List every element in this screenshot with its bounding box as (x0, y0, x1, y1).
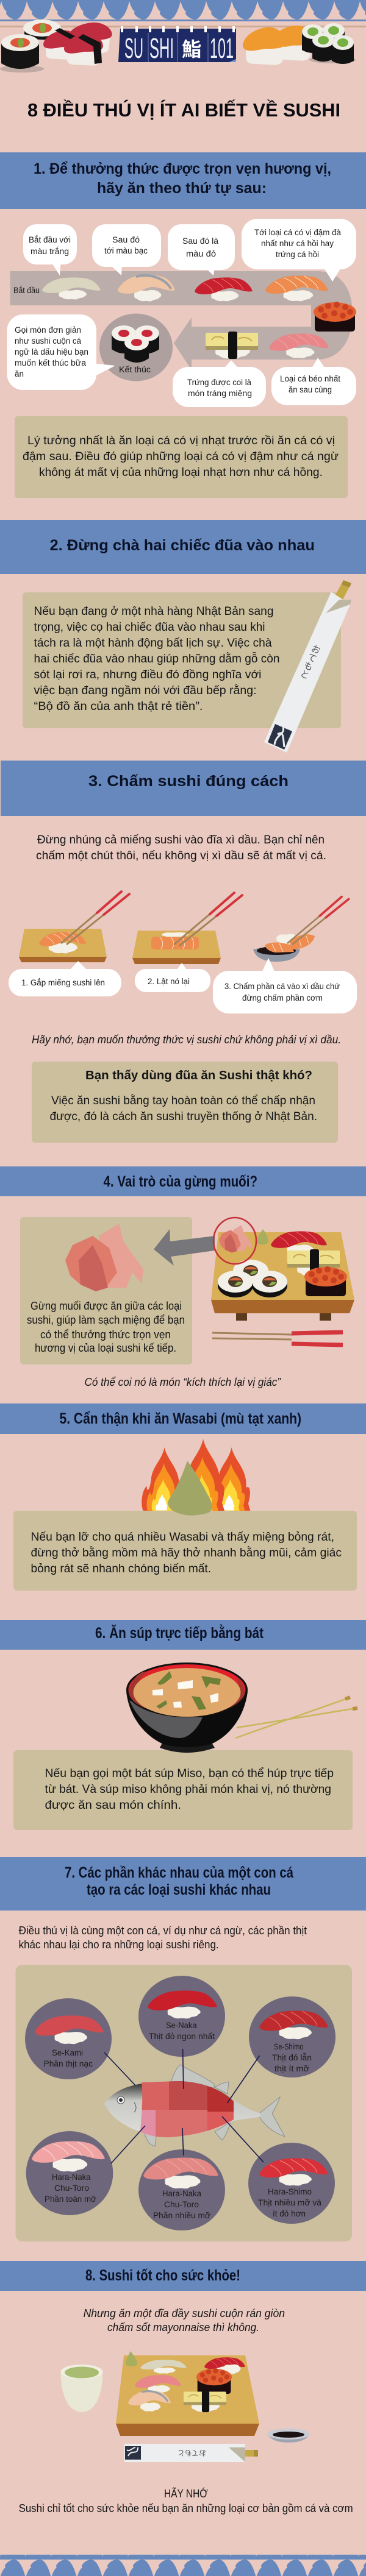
circle: Hara-Naka fatty: Hara-Naka (52, 2173, 91, 2182)
text box: chopsticks etiquette: sót lại rơi ra, nhưng điều đó đồng nghĩa với (34, 669, 262, 681)
closing reminder: HÃY NHỚ (164, 2487, 208, 2500)
curtain: 鮨 (182, 38, 201, 60)
chopsticks (212, 1332, 343, 1345)
circle: Hara-Naka medium: Chu-Toro (164, 2200, 199, 2209)
italic note: Nhưng ăn một đĩa đầy sushi cuộn rán giòn (84, 2307, 285, 2319)
curtain: SHI (149, 32, 174, 64)
circle: Se-Kami: Phần thịt nạc (44, 2059, 93, 2068)
italic note: Có thể coi nó là món “kích thích lại vị giác” (84, 1376, 281, 1388)
text: fish parts intro: Điều thú vị là cùng một con cá, ví dụ như cá ngừ, các phần thịt (19, 1925, 307, 1937)
bubble: egg: món tráng miệng (188, 389, 252, 398)
bubble: fattiest fish: Loại cá béo nhất (280, 374, 340, 383)
section 1 heading: 1. Để thưởng thức được trọn vẹn hương vị, (34, 160, 331, 177)
end circle (99, 313, 173, 381)
text box: wasabi: Nếu bạn lỡ cho quá nhiều Wasabi và thấy miệng bỏng rát, (30, 1531, 334, 1544)
text: dipping advice: Đừng nhúng cả miếng sushi vào đĩa xì dầu. Bạn chỉ nên (37, 834, 325, 846)
circle: Se-Naka: Thịt đỏ ngon nhất (149, 2032, 215, 2041)
circle: Hara-Naka fatty: Phần toàn mỡ (45, 2195, 96, 2204)
text box: wasabi: đừng thở bằng mồm mà hãy thở nhanh bằng mũi, cảm giác (30, 1546, 342, 1559)
start label: Bắt đầu (13, 286, 40, 295)
nigiri: red tuna (195, 277, 253, 301)
panel: pickled ginger: Gừng muối được ăn giữa các loại (30, 1300, 182, 1312)
curtain: SU (124, 32, 143, 64)
bubble: simple roll (7, 314, 115, 390)
text box: eating by hand (32, 1062, 338, 1143)
text box: chopsticks etiquette: hai chiếc đũa vào nhau giúp những dằm gỗ còn (34, 652, 279, 665)
text: dipping advice (36, 834, 326, 862)
icon: sushi rolls left (0, 20, 61, 73)
icon: wasabi on fire (142, 1439, 250, 1516)
text box: wasabi: bỏng rát sẽ nhanh chóng biến mất. (30, 1563, 211, 1575)
bubble: 1. Gắp miếng sushi lên (21, 978, 105, 987)
gunkan: salmon roe (314, 302, 356, 332)
text box: miso: từ bát. Và súp miso không phải món khai vị, nó thường (45, 1783, 331, 1796)
leader lines (104, 2049, 264, 2163)
bubble: simple roll: Gọi món đơn giản (15, 325, 81, 335)
bubble: đừng chấm phần cơm (242, 993, 323, 1002)
panel: pickled ginger: hương vị của loại sushi kế tiếp. (35, 1342, 176, 1354)
section 1 heading (0, 152, 366, 209)
section 6 heading (0, 1620, 366, 1650)
text box: chopsticks etiquette (23, 592, 341, 728)
closing reminder: Sushi chỉ tốt cho sức khỏe nếu bạn ăn những loại cơ bản gồm cá và cơm (19, 2502, 353, 2514)
illustration: sushi tray (116, 2351, 259, 2436)
circle: Hara-Naka fatty: Chu-Toro (54, 2184, 89, 2193)
illustration: sushi board (211, 1218, 354, 1345)
panel: pickled ginger: sushi, giúp làm sạch miệng để bạn (27, 1314, 185, 1326)
circle: Se-Shimo: Se-Shimo (274, 2042, 304, 2051)
section 3 heading: 3. Chấm sushi đúng cách (88, 773, 289, 790)
string (0, 26, 366, 27)
section 1 heading: hãy ăn theo thứ tự sau: (97, 180, 267, 197)
text box: chopsticks etiquette: tách ra là một hành động bất lịch sự. Việc chà (34, 637, 272, 650)
bubble: silver fish (92, 224, 161, 275)
text box: eating by hand: được, đó là cách ăn sushi truyền thống ở Nhật Bản. (50, 1110, 317, 1123)
panel: pickled ginger (20, 1217, 192, 1364)
step 2: flip it (132, 893, 242, 992)
bubble: salmon and roe: nhất như cá hồi hay (261, 239, 334, 248)
bubble: simple roll: muốn kết thúc bữa (15, 358, 87, 367)
circle: Se-Naka: Se-Naka (166, 2021, 197, 2030)
red circle highlight (214, 1218, 256, 1264)
bubble: egg: Trứng được coi là (187, 378, 251, 387)
icon: wrapped chopsticks: おてもと (178, 2449, 206, 2457)
nigiri: fatty tuna (269, 333, 329, 358)
bubble: simple roll: ăn (15, 369, 24, 378)
section 3 heading (1, 761, 366, 816)
nigiri: salmon (265, 275, 328, 301)
bubble: simple roll: như sushi cuộn cá (15, 336, 81, 346)
icon: chopsticks by the bowl (235, 1697, 357, 1738)
bubble: 2. Lật nó lại (148, 977, 190, 986)
bubble: white fish: màu trắng (30, 247, 69, 256)
icon: tea cup (60, 2365, 102, 2412)
text box: ideal order (15, 416, 348, 498)
section 2 heading (0, 520, 366, 574)
panel: eating order diagram (7, 219, 356, 407)
italic note: chấm sốt mayonnaise thì không. (107, 2321, 259, 2333)
small wasabi (257, 1229, 268, 1244)
circle: Hara-Shimo (248, 2143, 335, 2224)
italic note (84, 2307, 285, 2333)
section 4 heading (0, 1166, 366, 1196)
bubble (135, 963, 210, 992)
small ginger (219, 1225, 252, 1253)
bubble: silver fish: tới màu bạc (104, 246, 148, 255)
bubble: salmon and roe (242, 219, 356, 282)
section 5 heading: 5. Cẩn thận khi ăn Wasabi (mù tạt xanh) (60, 1410, 301, 1427)
icon: ginger (65, 1224, 143, 1291)
section 8 heading: 8. Sushi tốt cho sức khỏe! (85, 2267, 240, 2284)
top wave border (0, 0, 366, 21)
text box: chopsticks etiquette: trọng, việc cọ hai chiếc đũa vào nhau sau khi (34, 621, 265, 634)
panel: pickled ginger: có thể thưởng thức trọn vẹn (40, 1329, 171, 1341)
text box: eating by hand: Bạn thấy dùng đũa ăn Sushi thật khó? (85, 1069, 312, 1082)
circle: Se-Shimo: thịt ít mỡ (274, 2064, 309, 2073)
curtain (118, 26, 236, 64)
bubble: red fish (168, 224, 235, 275)
step 3: dip the fish (213, 897, 357, 1013)
bubble: salmon and roe: Tới loại cá có vị đậm đà (254, 228, 341, 237)
text box: chopsticks etiquette: Nếu bạn đang ở một nhà hàng Nhật Bản sang (34, 605, 273, 618)
icon: small maki rolls (302, 23, 356, 64)
section 7 heading (0, 1857, 366, 1911)
circle: Se-Kami: Se-Kami (52, 2048, 83, 2057)
bubble (213, 958, 357, 1013)
bubble: silver fish: Sau đó (112, 235, 140, 244)
closing reminder (19, 2487, 353, 2514)
circle: Hara-Naka medium: Hara-Naka (162, 2189, 201, 2198)
circle: Hara-Naka medium: Phần nhiều mỡ (153, 2211, 210, 2220)
icon: wrapped chopsticks (124, 2444, 258, 2462)
section 7 heading: tạo ra các loại sushi khác nhau (87, 1881, 271, 1898)
text: dipping advice: chấm một chút thôi, nếu không vị xì dầu sẽ át mất vị cá. (36, 850, 326, 862)
arrow: to ginger (154, 1229, 215, 1266)
bubble: white fish (23, 224, 77, 275)
section 2 heading: 2. Đừng chà hai chiếc đũa vào nhau (50, 537, 315, 554)
bubble: simple roll: ngữ là dấu hiệu bạn (15, 347, 88, 357)
text box: miso: được ăn sau món chính. (45, 1799, 181, 1812)
circle: Se-Naka (138, 1976, 225, 2057)
circle: Hara-Naka fatty (26, 2131, 113, 2215)
circle: Se-Kami (25, 1998, 112, 2079)
wrapper logo (268, 724, 292, 750)
section 4 heading: 4. Vai trò của gừng muối? (104, 1173, 257, 1190)
title: 8 ĐIỀU THÚ VỊ ÍT AI BIẾT VỀ SUSHI (27, 99, 340, 121)
circle: Se-Shimo (249, 1996, 336, 2077)
circle: Hara-Shimo: Hara-Shimo (268, 2187, 312, 2196)
section 5 heading (0, 1403, 366, 1434)
icon: miso bowl (126, 1662, 248, 1753)
section 6 heading: 6. Ăn súp trực tiếp bằng bát (95, 1623, 264, 1642)
header illustration (0, 20, 366, 73)
illustration: tuna cut map (104, 2065, 285, 2146)
section 8 heading (0, 2261, 366, 2291)
bubble: white fish: Bắt đầu với (29, 235, 71, 244)
icon: salmon nigiri (243, 26, 313, 65)
circle: Hara-Shimo: Thịt nhiều mỡ và (258, 2198, 321, 2207)
text: fish parts intro (19, 1925, 307, 1951)
panel: fish parts diagram (16, 1965, 352, 2241)
italic note: Hãy nhớ, bạn muốn thưởng thức vị sushi chứ không phải vị xì dầu. (32, 1034, 341, 1046)
text box: miso (13, 1750, 353, 1830)
icon: tuna nigiri (43, 23, 112, 66)
nigiri: silver fish (118, 275, 175, 301)
text box: ideal order: Lý tưởng nhất là ăn loại cá có vị nhạt trước rồi ăn cá có vị (27, 435, 335, 447)
circle: Hara-Shimo: ít đỏ hơn (273, 2209, 306, 2218)
icon: chopsticks in paper wrapper: おてもと (298, 643, 322, 680)
bubble: red fish: màu đỏ (186, 249, 216, 258)
bubble: fattiest fish (271, 358, 356, 405)
circle: Hara-Naka medium (138, 2149, 225, 2230)
bubble (9, 961, 121, 996)
text box: ideal order: không át mất vị của những loại nhạt hơn như cá hồng. (39, 466, 323, 479)
circle: Se-Shimo: Thịt đỏ lẫn (272, 2053, 312, 2062)
text box: eating by hand: Việc ăn sushi bằng tay hoàn toàn có thể chấp nhận (51, 1094, 315, 1107)
bottom wave border (0, 2555, 366, 2576)
text box: miso: Nếu bạn gọi một bát súp Miso, bạn có thể húp trực tiếp (45, 1767, 334, 1780)
icon: chopsticks in paper wrapper (264, 580, 351, 753)
bubble: egg (173, 360, 266, 407)
icon: soy sauce dish (267, 2429, 310, 2443)
text box: wasabi (13, 1511, 357, 1591)
section 7 heading: 7. Các phần khác nhau của một con cá (65, 1864, 293, 1881)
text box: ideal order: đậm sau. Điều đó giúp những loại cá có vị đậm như cá ngừ (23, 450, 339, 463)
track arrow (10, 271, 353, 370)
bubble: salmon and roe: trứng cá hồi (276, 250, 319, 259)
bubble: fattiest fish: ăn sau cùng (289, 385, 332, 394)
nigiri: egg (206, 332, 258, 359)
bubble: 3. Chấm phần cá vào xì dầu chứ (224, 982, 340, 991)
text box: chopsticks etiquette: “Bộ đồ ăn của anh thật rẻ tiền”. (34, 700, 203, 713)
nigiri: white fish (42, 277, 101, 299)
bubble: red fish: Sau đó là (182, 236, 219, 246)
end circle: Kết thúc (119, 365, 151, 374)
text box: chopsticks etiquette: việc bạn đang ngầm nói với đầu bếp rằng: (34, 684, 257, 697)
step 1: pick up sushi (9, 892, 129, 996)
curtain: 101 (210, 32, 234, 64)
text: fish parts intro: khác nhau lại cho ra những loại sushi riêng. (19, 1939, 219, 1951)
